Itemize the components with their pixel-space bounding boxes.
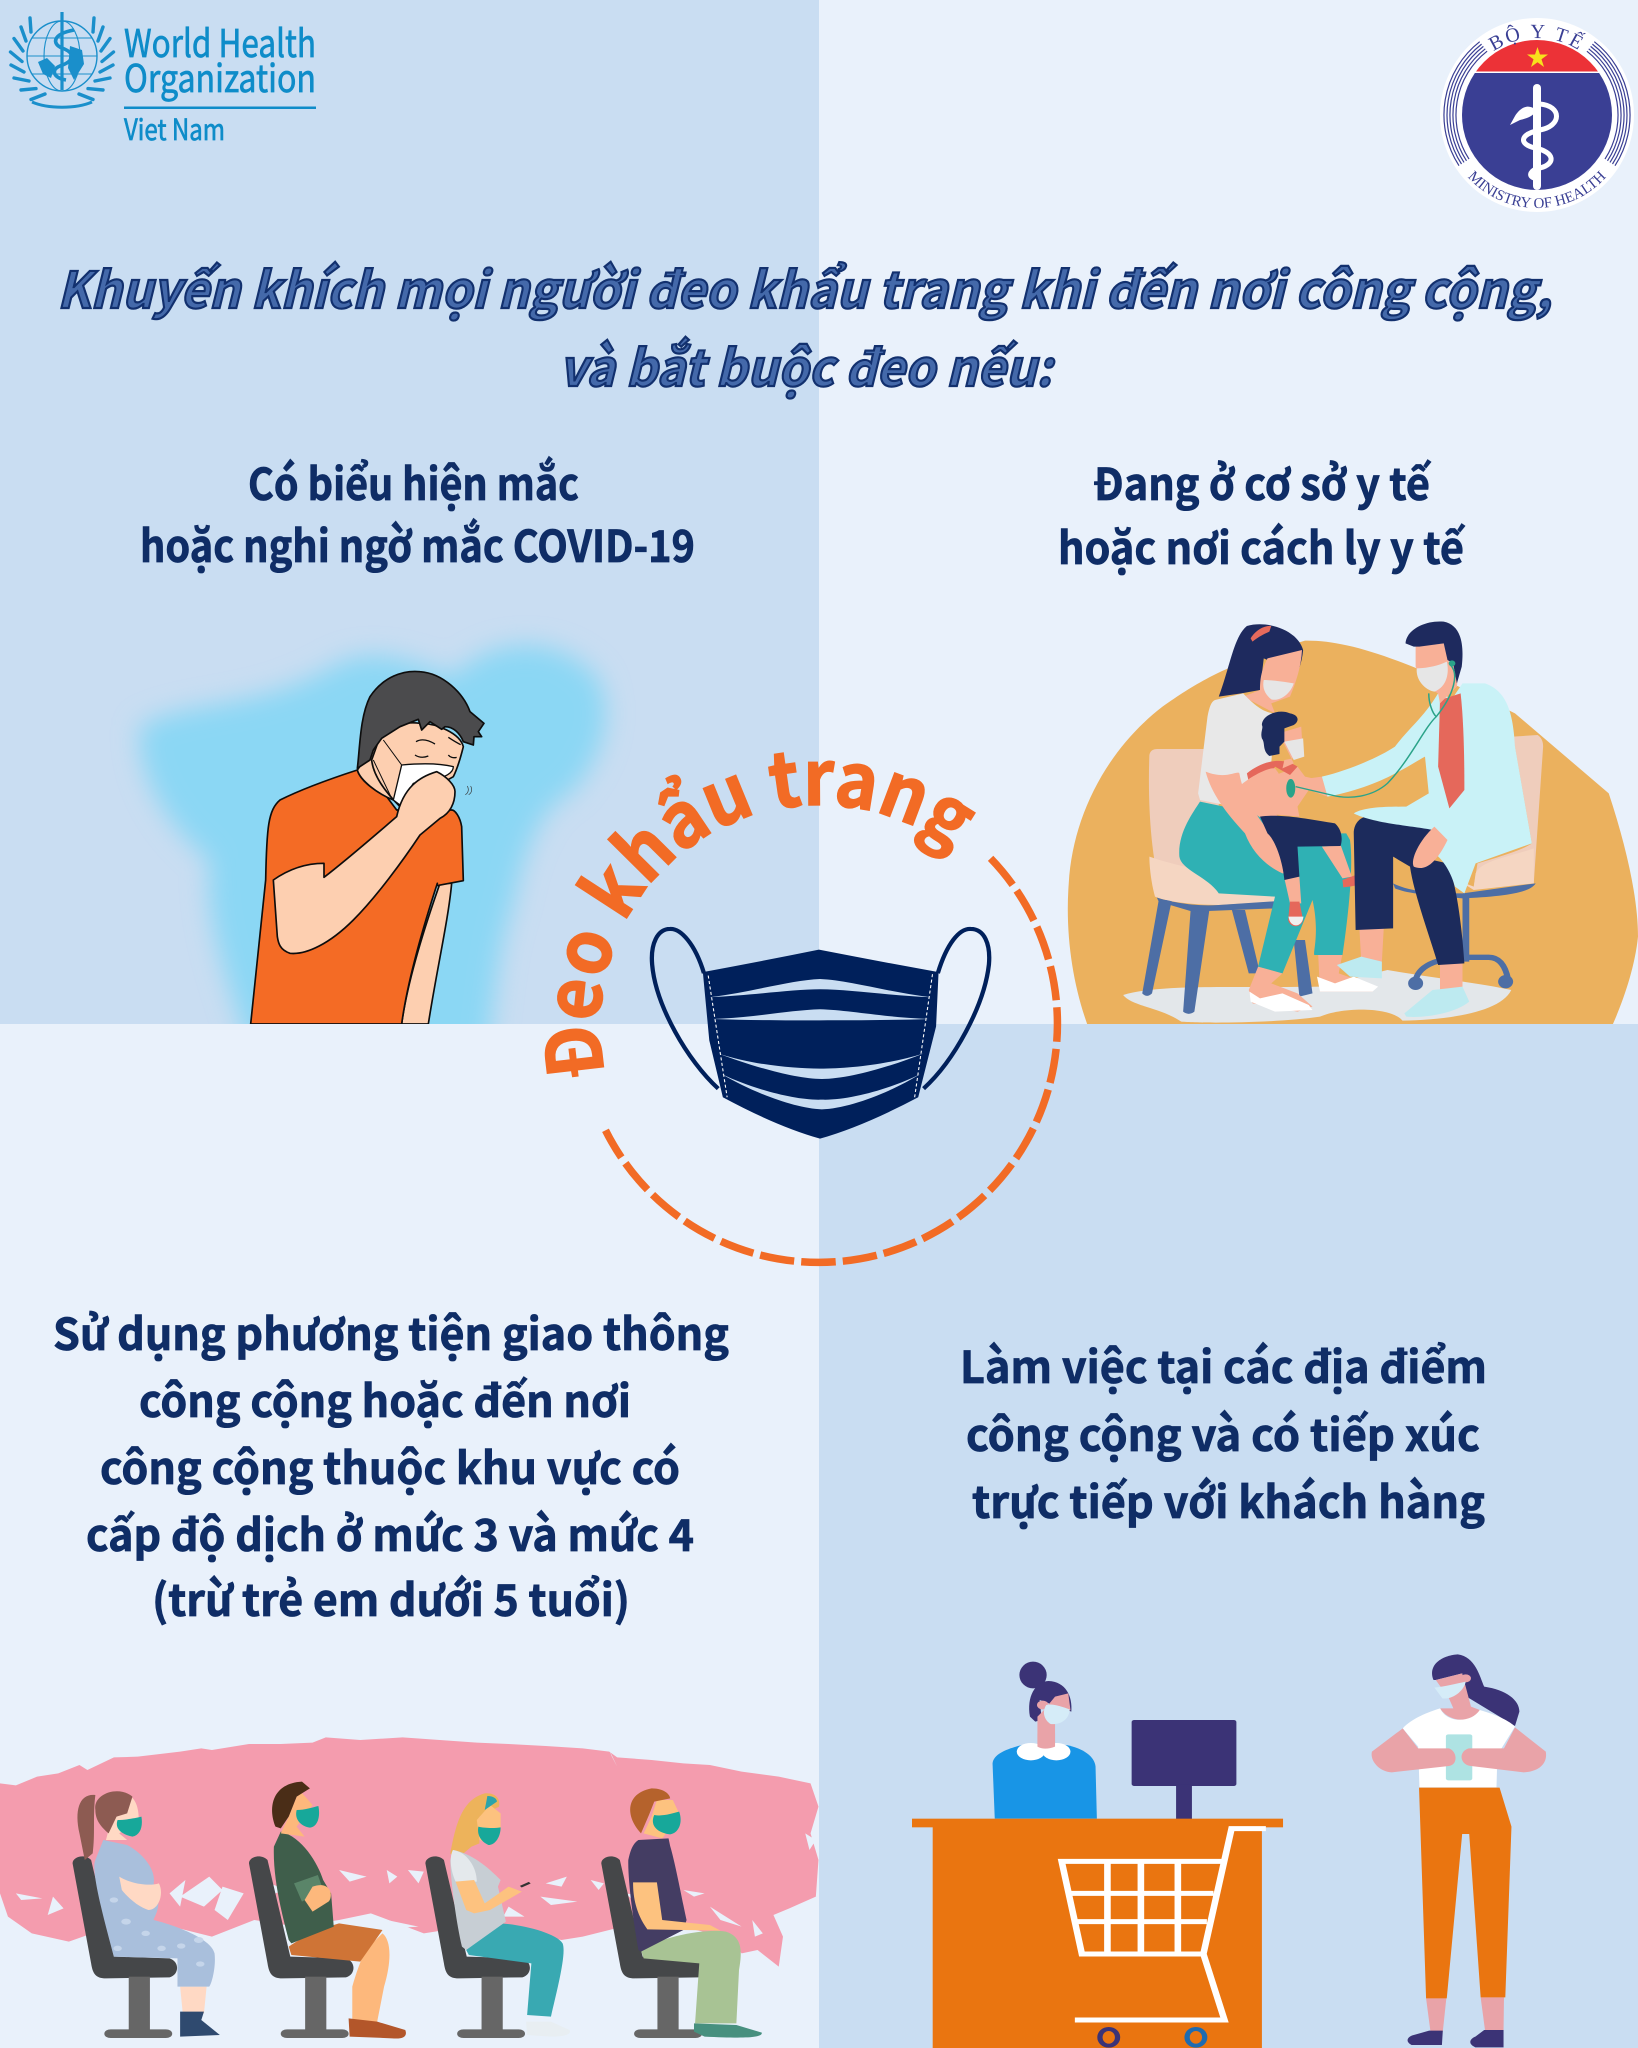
mother [1179,624,1378,1012]
title: và bắt buộc đeo nếu: [559,329,1056,401]
text: condition 3: Sử dụng phương tiện giao thông [53,1299,729,1363]
illustration: shop counter and customer [912,1654,1546,2048]
text: condition 2 [1058,449,1465,577]
text: condition 4: trực tiếp với khách hàng [972,1467,1485,1531]
title [57,251,1552,401]
passenger 3 [450,1793,570,2037]
dashed circle [606,858,1057,1262]
icon: red and blue disc [1462,40,1612,190]
man figure [251,671,484,1024]
text: condition 2: hoặc nơi cách ly y tế [1058,513,1465,577]
icon: WHO emblem [10,12,114,107]
text: World Health Organization [124,13,316,149]
passenger 1 [77,1791,220,2037]
text: World Health Organization: Viet Nam [124,107,225,149]
text: condition 4: Làm việc tại các địa điểm [960,1332,1487,1396]
WHO Viet Nam logo [10,12,316,149]
pink brush stroke [0,1737,818,1967]
customer [1372,1654,1546,2047]
illustration: seated passengers [0,1737,818,2039]
floor shadow [1123,970,1511,1023]
left chair [1142,749,1312,1014]
wreath [10,18,114,100]
counter [912,1819,1283,2048]
doctor [1286,621,1532,1017]
wheels [1100,2029,1205,2046]
orange blob [1068,641,1638,1025]
illustration: coughing man [140,645,606,1060]
passenger 2 [272,1782,406,2039]
text: condition 4 [960,1332,1487,1531]
text: condition 3: cấp độ dịch ở mức 3 và mức 4 [86,1500,694,1564]
text: condition 2: Đang ở cơ sở y tế [1093,449,1431,513]
icon: face mask [652,929,989,1139]
text: condition 1 [140,449,695,575]
text: condition 3 [53,1299,729,1629]
text: condition 3: công cộng thuộc khu vực có [100,1433,680,1497]
right chair [1393,735,1543,990]
cashier [993,1662,1097,1819]
text: MINISTRY OF HEALTH: MINISTRY OF HEALTH [1468,170,1606,208]
text: condition 1: hoặc nghi ngờ mắc COVID-19 [140,511,695,575]
text: condition 1: Có biểu hiện mắc [248,449,579,513]
Ministry of Health logo [1440,18,1634,212]
central badge [544,752,1062,1266]
text: Đeo khẩu trang: Đeo khẩu trang [544,752,976,1078]
title: Khuyến khích mọi người đeo khẩu trang khi đến nơi công cộng, [57,251,1552,323]
text: World Health Organization: World Health [124,13,316,68]
child [1242,712,1355,926]
passenger 4 [628,1788,762,2038]
text: BỘ Y TẾ: BỘ Y TẾ [1488,24,1586,51]
side ring lines [1444,42,1630,166]
brush flecks [16,1750,816,1937]
monitor [1132,1720,1236,1819]
text: condition 4: công cộng và có tiếp xúc [966,1400,1480,1464]
blue cloud [140,645,606,1060]
illustration: doctor examining child [1068,621,1638,1025]
text: condition 3: công cộng hoặc đến nơi [139,1366,631,1430]
shopping cart [1062,1829,1266,2020]
seats [73,1856,706,2038]
text: World Health Organization: Organization [124,48,316,103]
text: condition 3: (trừ trẻ em dưới 5 tuổi) [152,1565,630,1629]
